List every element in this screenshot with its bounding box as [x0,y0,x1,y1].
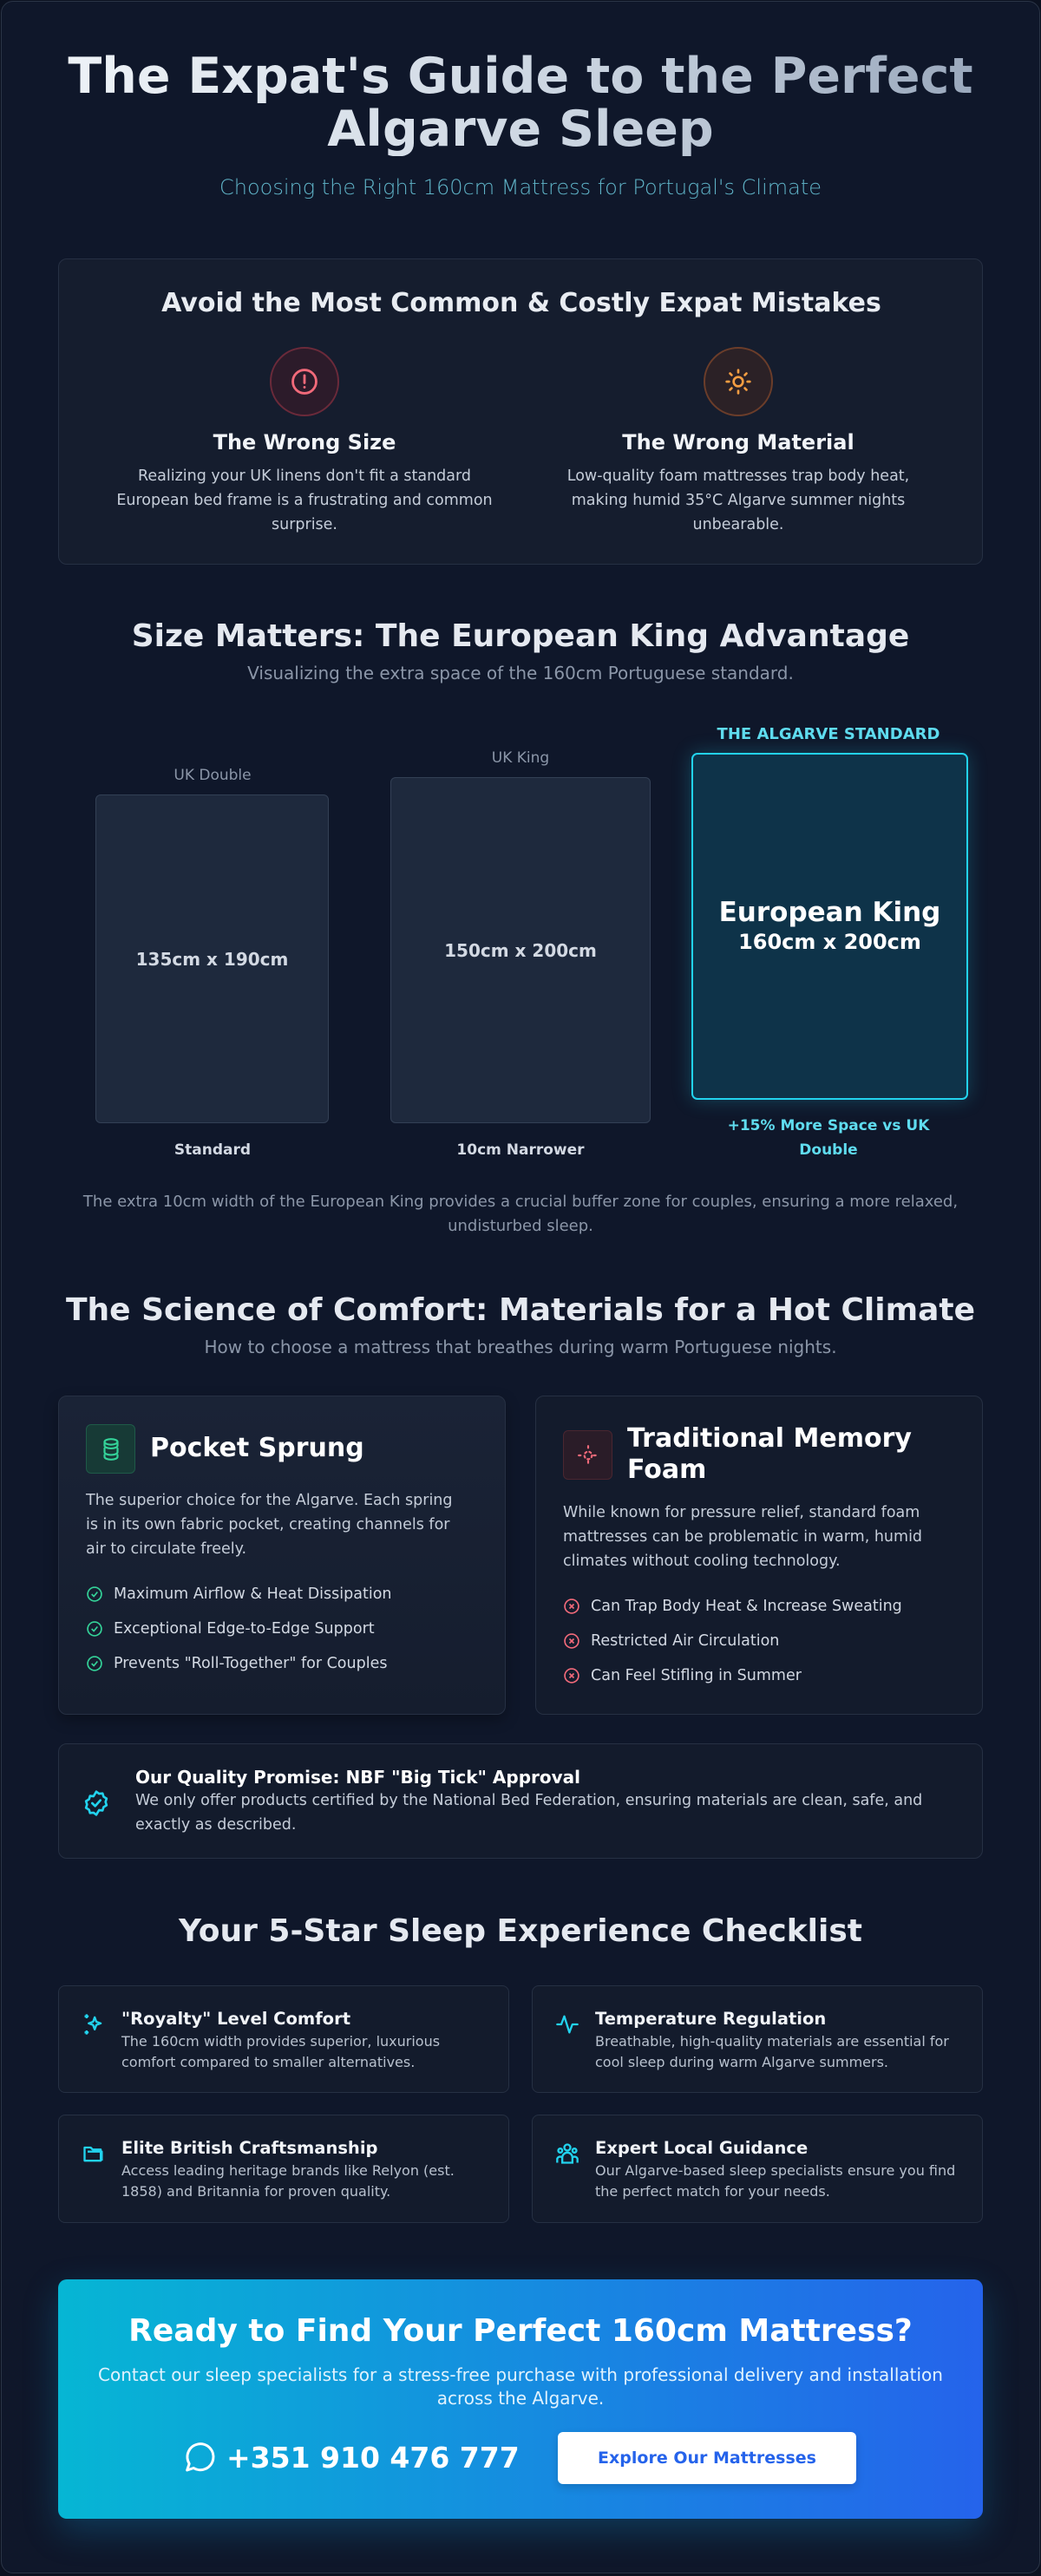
bar: UK double: UK Double [174,767,252,784]
mistake: wrong size [116,347,493,533]
title: The Expat's Guide to the Perfect [68,48,973,105]
note: buffer zone: The extra 10cm width of the European King provides a crucial buffer zone for couples, ensuring a more relaxed, undisturbed sleep. [83,1193,958,1235]
bar: UK double [95,767,329,1159]
chart: mattress size comparison [95,725,977,1159]
icon: pulse [556,2016,579,2033]
icon: people [556,2143,579,2164]
card: craftsmanship: Access leading heritage brands like Relyon (est. 1858) and Britannia for proven quality. [121,2162,455,2200]
mistake: wrong size: Realizing your UK linens don't fit a standard European bed frame is a frustrating and common surprise. [116,467,493,533]
icon: sparkles [85,2014,102,2035]
card: craftsmanship: Elite British Craftsmanship [121,2138,377,2158]
CTA text: Contact our sleep specialists for a stress-free purchase with professional delivery and installation across the Algarve. [98,2364,943,2409]
mistake: wrong size: The Wrong Size [213,430,396,454]
bar: UK king: UK King [492,749,549,767]
list: drawbacks: Can Trap Body Heat & Increase Sweating [591,1598,902,1615]
list: benefits: Prevents "Roll-Together" for Couples [114,1655,387,1672]
phone number: +351 910 476 777 [226,2441,520,2474]
button: explore [558,2432,856,2484]
card: local guidance: Expert Local Guidance [595,2138,808,2158]
subtitle: Choosing the Right 160cm Mattress for Portugal's Climate [219,175,822,199]
subheading: science: How to choose a mattress that breathes during warm Portuguese nights. [204,1337,837,1357]
title: pocket sprung: Pocket Sprung [150,1433,364,1463]
bar: European king: 160cm x 200cm [738,930,921,954]
title: Algarve Sleep [327,101,714,158]
card: temperature [532,1985,983,2093]
list: drawbacks: Restricted Air Circulation [591,1632,779,1650]
title: memory foam: Traditional Memory Foam [627,1423,912,1485]
card: royalty comfort: "Royalty" Level Comfort [121,2009,350,2029]
bar: European king: +15% More Space vs UK Double [728,1117,929,1159]
CTA heading: Ready to Find Your Perfect 160cm Mattress? [128,2313,913,2349]
list: benefits: Maximum Airflow & Heat Dissipation [114,1585,392,1603]
bar: UK king [390,749,651,1159]
heading: checklist: Your 5-Star Sleep Experience Checklist [179,1913,862,1949]
icon: folder [83,2146,102,2161]
list: drawbacks: Can Feel Stifling in Summer [591,1667,802,1684]
card: temperature: Breathable, high-quality materials are essential for cool sleep during warm Algarve summers. [595,2033,949,2070]
icon: coil [86,1424,135,1474]
panel: pocket sprung [58,1396,506,1715]
panel: call to action [58,2279,983,2519]
list: benefits [87,1585,392,1672]
button: explore: Explore Our Mattresses [598,2449,816,2468]
heading: science of comfort: The Science of Comfort: Materials for a Hot Climate [66,1292,975,1328]
title [17,50,1024,156]
list: drawbacks [564,1598,902,1684]
bar: UK double: Standard [174,1141,251,1159]
panel: memory foam [535,1396,983,1715]
mistakes heading: Avoid the Most Common & Costly Expat Mistakes [161,288,881,318]
bar: UK king: 150cm x 200cm [444,940,597,961]
card: royalty comfort: The 160cm width provides superior, luxurious comfort compared to smaller alternatives. [121,2033,440,2070]
bar: UK king: 10cm Narrower [456,1141,585,1159]
card: local guidance: Our Algarve-based sleep specialists ensure you find the perfect match for your needs. [595,2162,955,2200]
bar: European king [683,725,977,1159]
bar: UK double: 135cm x 190cm [136,949,288,970]
card: royalty comfort [58,1985,509,2093]
icon: sun [704,347,773,416]
heading: size matters: Size Matters: The European King Advantage [132,618,909,654]
mistake: wrong material: Low-quality foam mattresses trap body heat, making humid 35°C Algarve summer nights unbearable. [567,467,909,533]
text: memory foam desc: While known for pressure relief, standard foam mattresses can be problematic in warm, humid climates without cooling technology. [563,1504,922,1570]
card: local guidance [532,2115,983,2223]
icon: badge check [85,1790,108,1816]
icon: heat [563,1430,612,1480]
panel: mistakes [58,258,983,565]
text: quality promise: We only offer products certified by the National Bed Federation, ensuring materials are clean, safe, and exactly as described. [135,1792,922,1834]
list: benefits: Exceptional Edge-to-Edge Support [114,1620,375,1638]
callout: quality promise [58,1743,983,1859]
card: craftsmanship [58,2115,509,2223]
text: quality promise [135,1767,922,1834]
bar: European king: THE ALGARVE STANDARD [717,725,940,743]
text: quality promise: Our Quality Promise: NBF "Big Tick" Approval [135,1767,580,1788]
icon: alert [270,347,339,416]
bar: European king: European King [719,897,940,928]
card: temperature: Temperature Regulation [595,2009,826,2029]
text: pocket sprung desc: The superior choice for the Algarve. Each spring is in its own fabric pocket, creating channels for air to circulate freely. [86,1492,453,1558]
mistake: wrong material: The Wrong Material [622,430,854,454]
mistake: wrong material [567,347,909,533]
subheading: size: Visualizing the extra space of the 160cm Portuguese standard. [247,663,794,683]
